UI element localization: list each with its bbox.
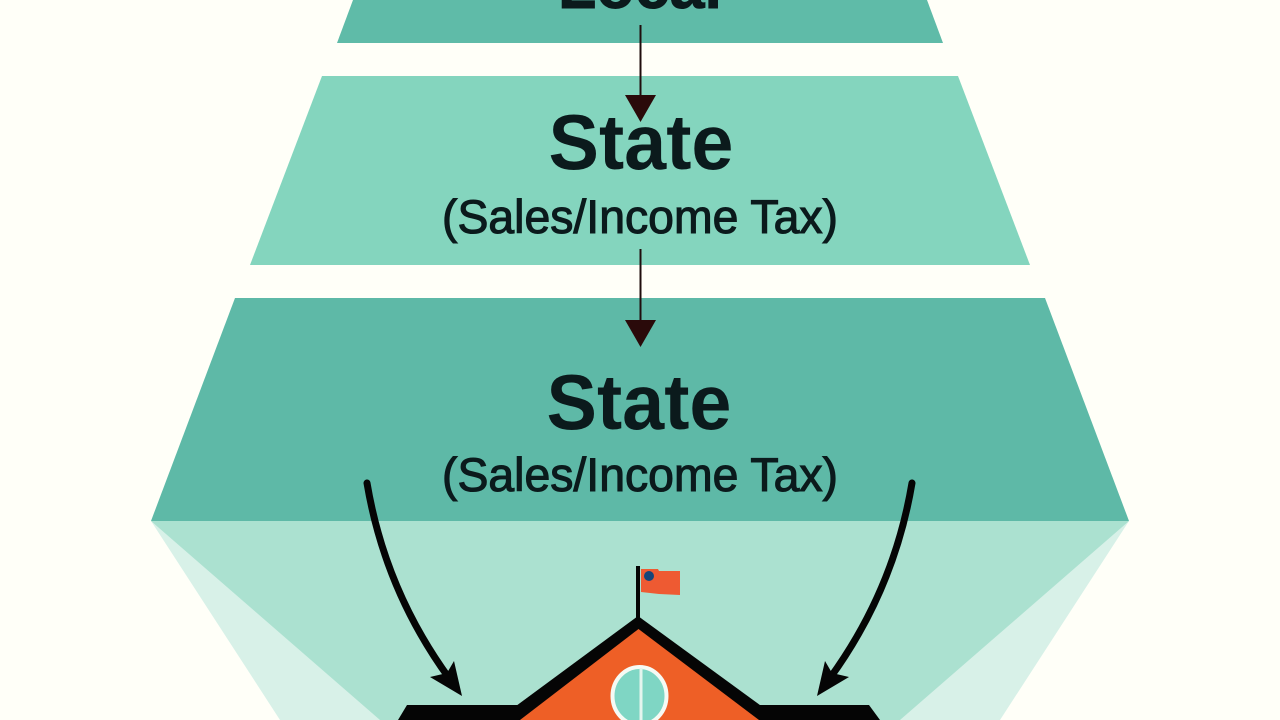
school side roofs xyxy=(398,705,880,720)
tier: state lower xyxy=(151,298,1129,521)
label: state upper: State xyxy=(548,98,734,186)
tier: state upper xyxy=(250,76,1030,265)
arrow: curved left into school xyxy=(367,483,462,696)
school gable outline xyxy=(516,616,764,720)
arrow: state to state xyxy=(625,249,656,347)
funnel spill: lightest outer glow xyxy=(151,521,1129,720)
school gable face xyxy=(520,629,759,720)
tier: local xyxy=(337,0,943,43)
icon: school building xyxy=(398,566,880,720)
arrow: local to state xyxy=(625,25,656,122)
arrow: curved right into school xyxy=(817,483,912,696)
sublabel: state lower: (Sales/Income Tax) xyxy=(442,448,838,501)
sublabel: state upper: (Sales/Income Tax) xyxy=(442,190,838,243)
school round window xyxy=(612,667,666,720)
funnel spill: inner light area xyxy=(151,521,1129,720)
label: state lower: State xyxy=(546,358,732,446)
school flag xyxy=(636,566,680,618)
